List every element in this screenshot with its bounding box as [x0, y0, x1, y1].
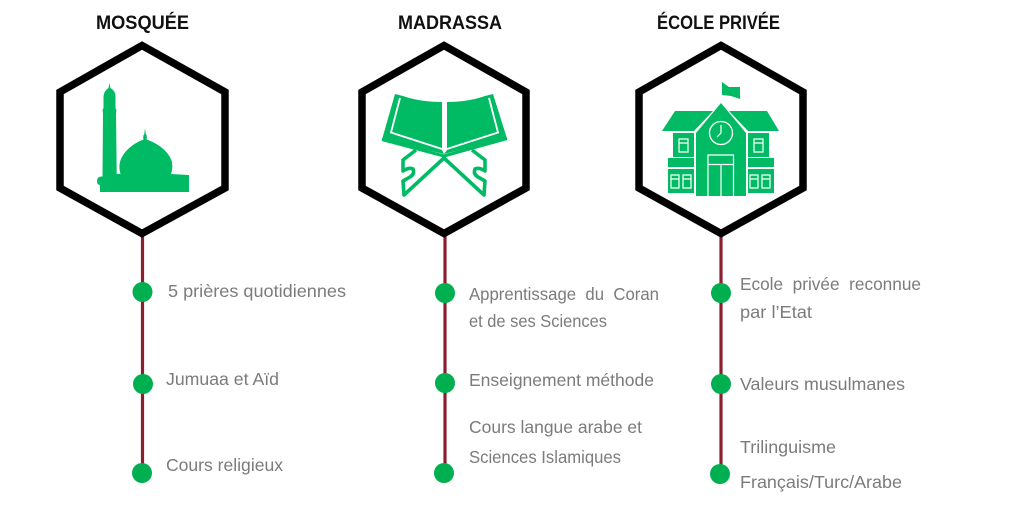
- hexagon: école privée: [639, 46, 803, 234]
- heading: mosquée: MOSQUÉE: [96, 12, 189, 34]
- bullet: madrassa 2: [435, 373, 455, 393]
- bullet: mosquée 2: [133, 374, 153, 394]
- text: madrassa 1 line 1: Apprentissage du Coran: [469, 284, 659, 304]
- text: madrassa 1 line 2: et de ses Sciences: [469, 311, 607, 331]
- heading: école privée: ÉCOLE PRIVÉE: [657, 12, 780, 34]
- text: école 3 line 2: Français/Turc/Arabe: [740, 472, 902, 492]
- text: école 3 line 1: Trilinguisme: [740, 437, 836, 457]
- hexagon: mosquée: [60, 46, 225, 234]
- timeline: madrassa: [443, 235, 447, 473]
- text: madrassa 3 line 2: Sciences Islamiques: [469, 447, 621, 467]
- panel: mosquée: [60, 12, 346, 483]
- hexagon: madrassa: [362, 46, 526, 234]
- bullet: école 2: [711, 374, 731, 394]
- text: mosquée 1: 5 prières quotidiennes: [168, 281, 346, 301]
- icon: mosque: [97, 83, 189, 192]
- text: école 1 line 1: Ecole privée reconnue: [740, 274, 921, 294]
- panel: école privée: [639, 12, 921, 492]
- icon: open quran on stand: [382, 94, 507, 195]
- text: madrassa 2: Enseignement méthode: [469, 370, 654, 390]
- text: madrassa 3 line 1: Cours langue arabe et: [469, 417, 642, 437]
- text: école 2: Valeurs musulmanes: [740, 374, 905, 394]
- bullet: madrassa 3: [434, 463, 454, 483]
- bullet: école 3: [710, 464, 730, 484]
- icon: school building: [662, 82, 779, 196]
- timeline: mosquée: [141, 235, 144, 473]
- bullet: école 1: [711, 283, 731, 303]
- bullet: mosquée 1: [132, 282, 152, 302]
- bullet: madrassa 1: [435, 283, 455, 303]
- text: école 1 line 2: par l’Etat: [740, 302, 812, 322]
- timeline: école privée: [719, 235, 723, 474]
- text: mosquée 2: Jumuaa et Aïd: [166, 369, 279, 389]
- panel: madrassa: [362, 13, 659, 483]
- text: mosquée 3: Cours religieux: [166, 455, 283, 475]
- heading: madrassa: MADRASSA: [398, 13, 502, 34]
- bullet: mosquée 3: [132, 463, 152, 483]
